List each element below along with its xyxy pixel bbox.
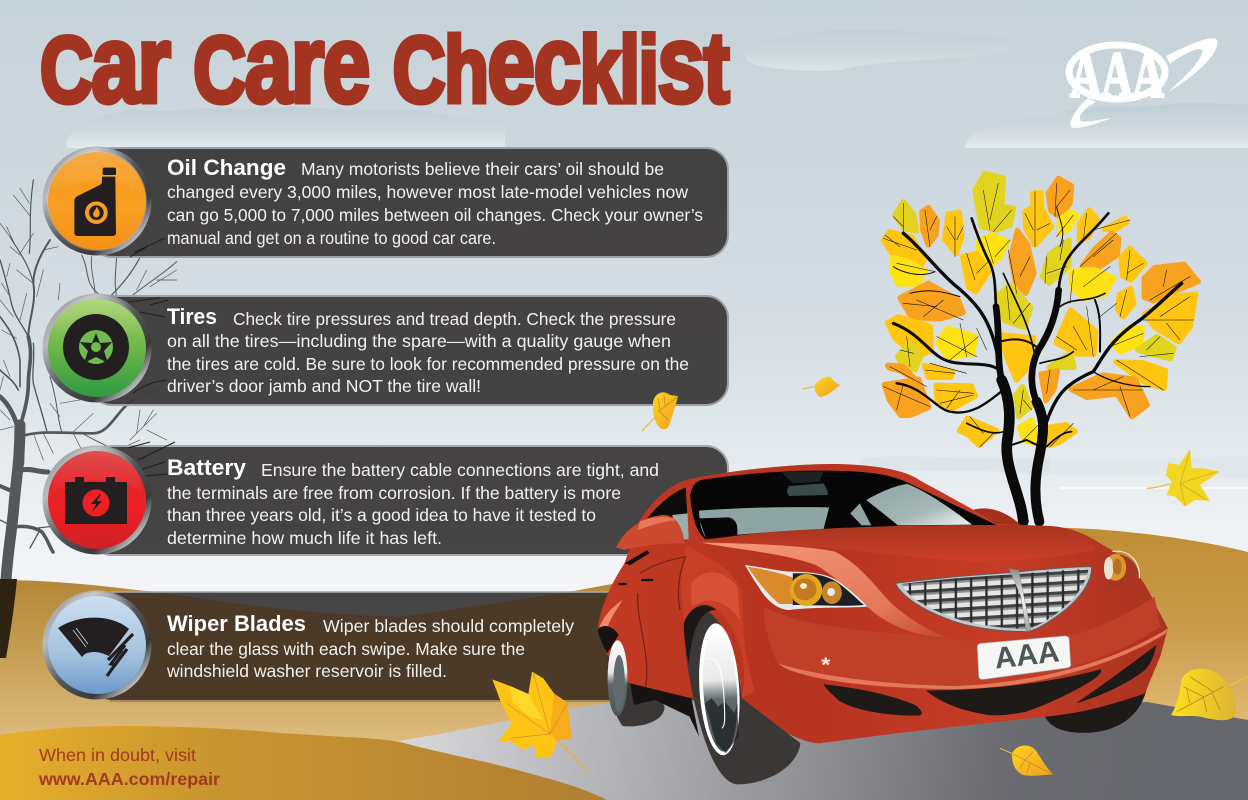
ground: distant golden hill [760, 527, 1248, 800]
leaf: near tire panel [642, 392, 678, 431]
autumn tree [883, 173, 1198, 522]
icon: battery badge [42, 446, 152, 554]
tires text: driver’s door jamb and NOT the tire wall! [167, 376, 481, 396]
panel: battery [90, 446, 728, 555]
rearview mirror [787, 483, 828, 496]
hood highlight [701, 543, 948, 638]
bottom-left hill [0, 726, 607, 800]
battery text: the terminals are free from corrosion. If the battery is more [167, 483, 621, 503]
panel: wiper blades [104, 591, 694, 702]
leaf: right foreground [1171, 669, 1248, 720]
windshield glass right [866, 484, 972, 525]
windshield glass left [699, 507, 829, 538]
oil change text: manual and get on a routine to good car care. [167, 228, 496, 248]
wiper blades text [166, 611, 574, 681]
battery text: Ensure the battery cable connections are tight, and [261, 460, 659, 480]
wiper blades text: Wiper Blades [167, 611, 306, 636]
front rim [696, 622, 743, 756]
front fender [681, 545, 755, 698]
far fender [973, 508, 1021, 527]
right headlight [1104, 551, 1139, 595]
door seam and handles [618, 557, 686, 687]
bumper crease [778, 628, 1168, 689]
tires text [167, 304, 689, 396]
windshield [690, 471, 996, 539]
grille [895, 567, 1092, 632]
footer text: When in doubt, visit [39, 745, 196, 765]
tires text: Tires [167, 304, 217, 329]
bare tree: left [0, 180, 177, 580]
wiper blades text: clear the glass with each swipe. Make sure the [167, 639, 525, 659]
leaf: yellow maple right [1147, 449, 1220, 507]
twigs over panels [128, 238, 175, 476]
hood [690, 525, 1095, 561]
front tire [686, 610, 800, 784]
panel: oil change [90, 148, 728, 257]
rear tire [607, 634, 665, 726]
battery text: than three years old, it’s a good idea to have it tested to [167, 505, 596, 525]
seat headrest [699, 517, 737, 538]
lower branches [22, 469, 48, 472]
far front tire [1043, 688, 1147, 733]
leaf: on road [1000, 746, 1053, 776]
icon: wiper badge [42, 590, 152, 700]
battery text [167, 455, 659, 548]
footer text: www.AAA.com/repair [38, 769, 220, 789]
panel: tires [90, 296, 728, 405]
windshield wiper [58, 618, 133, 676]
tires text: the tires are cold. Be sure to look for recommended pressure on the [167, 354, 689, 374]
tires text: Check tire pressures and tread depth. Check the pressure [233, 309, 676, 329]
rear wheel arch and rim [598, 626, 628, 716]
side mirror [616, 515, 685, 550]
icon: tire badge [42, 294, 152, 402]
clouds [66, 30, 1248, 489]
rear fender highlight [600, 600, 623, 628]
car body [598, 464, 1168, 743]
wiper blades text: Wiper blades should completely [323, 616, 574, 636]
tires text: on all the tires—including the spare—with a quality gauge when [167, 331, 671, 351]
battery text: Battery [167, 455, 247, 480]
icon: oil bottle badge [42, 146, 152, 256]
trunk [6, 425, 20, 580]
oil change text: can go 5,000 to 7,000 miles between oil changes. Check your owner’s [167, 205, 703, 225]
battery text: determine how much life it has left. [167, 528, 442, 548]
car [598, 464, 1168, 784]
underbody shadow [630, 683, 699, 737]
oil bottle [74, 168, 116, 236]
left headlight [745, 565, 867, 610]
bumper intake centre [926, 669, 1101, 715]
logo: AAA: AAA [1070, 39, 1164, 112]
bumper intake right [1076, 645, 1156, 703]
marker light: * [821, 653, 831, 676]
tire [63, 314, 129, 380]
licence plate [977, 635, 1071, 679]
bumper intake left [823, 684, 922, 716]
wheel arch shadow [684, 605, 716, 663]
side window [647, 487, 689, 543]
tree branches [883, 183, 1193, 522]
oil change text: Oil Change [167, 155, 286, 180]
oil change text: changed every 3,000 miles, however most late-model vehicles now [167, 182, 688, 202]
road [380, 697, 1248, 800]
footer text [38, 745, 220, 789]
licence plate: AAA [993, 635, 1061, 676]
bumper band [763, 597, 1160, 687]
leaf: big maple foreground [492, 672, 587, 773]
oil change text: Many motorists believe their cars’ oil should be [301, 159, 664, 179]
battery [65, 477, 127, 524]
oil change text [167, 155, 703, 248]
ground: left tan hills [0, 580, 760, 800]
title: Car Care Checklist [40, 3, 729, 126]
tree foliage [883, 173, 1198, 445]
bare tree trunk over hill [0, 579, 17, 658]
wiper blades text: windshield washer reservoir is filled. [166, 661, 447, 681]
leaf: orange small top [802, 377, 840, 397]
